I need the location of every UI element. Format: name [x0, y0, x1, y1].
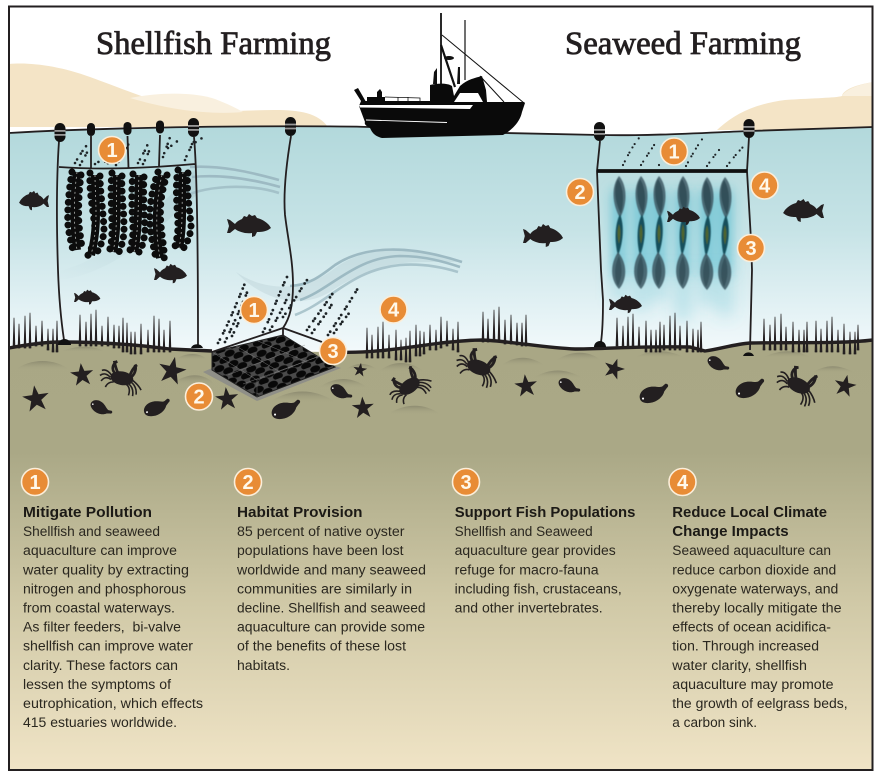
- column 3: support fish populations: 3: [460, 472, 472, 494]
- ocean current streaks: oyster cage: [236, 250, 462, 315]
- column 4: reduce local climate change impacts: [669, 468, 848, 730]
- column 4: reduce local climate change impacts: water clarity, shellfish: [671, 658, 807, 673]
- column 2: habitat provision: [234, 468, 426, 673]
- column 1: mitigate pollution: lessen the symptoms of: [23, 677, 171, 692]
- number badges: diagram: 2: [193, 386, 205, 408]
- nutrient particles: [75, 137, 203, 165]
- column 1: mitigate pollution: water quality by extracting: [22, 562, 189, 577]
- column 3: support fish populations: [452, 468, 635, 616]
- oyster cage farm: [203, 117, 358, 401]
- seabed line: [9, 340, 873, 352]
- column 2: habitat provision: aquaculture can provide some: [237, 620, 425, 635]
- flatfish: [88, 352, 766, 421]
- water body: [9, 126, 873, 350]
- waterline: [9, 126, 873, 135]
- column 1: mitigate pollution: nitrogen and phosphorous: [23, 581, 186, 596]
- column 4: reduce local climate change impacts: reduce carbon dioxide and: [672, 562, 836, 577]
- ropes and crossbar: [57, 135, 198, 345]
- mussel strings: [68, 170, 191, 261]
- column 1: mitigate pollution: shellfish can improve water: [23, 639, 194, 654]
- fishing boat: [354, 13, 525, 138]
- ropes: [597, 137, 752, 350]
- number badges: diagram: 1: [668, 142, 680, 164]
- column 4: reduce local climate change impacts: oxygenate waterways, and: [672, 581, 838, 596]
- sediment mounds: [15, 347, 855, 414]
- number badges: diagram: 1: [248, 300, 260, 322]
- number badges: diagram: 4: [388, 300, 400, 322]
- column 2: habitat provision: 2: [242, 472, 254, 494]
- crossbar: [597, 169, 747, 173]
- number badges: diagram: [98, 136, 778, 410]
- column 1: mitigate pollution: Shellfish and seaweed: [23, 524, 160, 539]
- column 4: reduce local climate change impacts: Reduce Local Climate: [672, 504, 827, 521]
- buoys: [54, 118, 199, 142]
- cage shadow: [203, 366, 341, 401]
- anchors: [58, 339, 203, 348]
- seaweed farm: [594, 119, 754, 356]
- column 1: mitigate pollution: clarity. These factors can: [23, 658, 178, 673]
- column 2: habitat provision: populations have been lost: [237, 543, 404, 558]
- column 1: mitigate pollution: Mitigate Pollution: [23, 504, 152, 521]
- number badges: diagram: 2: [574, 182, 586, 204]
- column 1: mitigate pollution: 1: [29, 472, 41, 494]
- nutrient particles: [218, 277, 358, 343]
- ocean current streaks: shellfish lines: [50, 167, 280, 280]
- column 3: support fish populations: refuge for macro-fauna: [455, 562, 599, 577]
- column 4: reduce local climate change impacts: tion. Through increased: [672, 639, 819, 654]
- fish school: [19, 191, 824, 313]
- distant shoreline hills: [9, 64, 873, 130]
- column 2: habitat provision: of the benefits of these lost: [237, 639, 406, 654]
- title: shellfish farming: Shellfish Farming: [96, 26, 331, 62]
- column 1: mitigate pollution: 415 estuaries worldwide.: [23, 715, 177, 730]
- column 4: reduce local climate change impacts: Change Impacts: [672, 523, 789, 540]
- column 3: support fish populations: aquaculture gear provides: [455, 543, 616, 558]
- column 1: mitigate pollution: eutrophication, which effects: [23, 696, 203, 711]
- column 2: habitat provision: decline. Shellfish and seaweed: [237, 600, 426, 616]
- number badges: diagram: 4: [759, 176, 771, 198]
- shellfish longline farm: [54, 118, 203, 348]
- seaweed blades: [612, 176, 732, 290]
- column 3: support fish populations: Shellfish and Seaweed: [455, 524, 593, 539]
- column 2: habitat provision: habitats.: [237, 658, 290, 673]
- column 1: mitigate pollution: As filter feeders, bi-valve: [23, 620, 181, 635]
- cage: [212, 335, 335, 397]
- cage mesh: [212, 341, 335, 397]
- title: seaweed farming: Seaweed Farming: [565, 26, 801, 62]
- number badges: diagram: 3: [327, 341, 339, 363]
- column 4: reduce local climate change impacts: 4: [677, 472, 689, 494]
- column 4: reduce local climate change impacts: the growth of eelgrass beds,: [672, 696, 848, 711]
- column 4: reduce local climate change impacts: aquaculture may promote: [672, 677, 834, 692]
- column 2: habitat provision: Habitat Provision: [237, 504, 362, 521]
- seagrass beds: [13, 307, 859, 362]
- column 1: mitigate pollution: from coastal waterways.: [23, 600, 175, 616]
- seaweed glow: [619, 190, 725, 320]
- column 3: support fish populations: and other invertebrates.: [455, 600, 603, 616]
- number badges: diagram: 1: [106, 140, 118, 162]
- column 2: habitat provision: communities are similarly in: [237, 581, 412, 596]
- column 4: reduce local climate change impacts: effects of ocean acidifica-: [672, 620, 831, 635]
- buoys: [594, 119, 754, 141]
- number badges: diagram: 3: [745, 238, 757, 260]
- crabs: [97, 344, 825, 412]
- nutrient particles: [623, 138, 744, 166]
- column 4: reduce local climate change impacts: Seaweed aquaculture can: [672, 543, 831, 558]
- anchors: [594, 341, 754, 356]
- buoy and line: [285, 117, 296, 136]
- column 3: support fish populations: including fish, crustaceans,: [455, 581, 622, 596]
- sea floor: [9, 340, 873, 771]
- column 1: mitigate pollution: [22, 468, 203, 730]
- column 4: reduce local climate change impacts: thereby locally mitigate the: [672, 600, 842, 616]
- column 2: habitat provision: 85 percent of native oyster: [237, 524, 405, 539]
- starfish: [21, 354, 858, 418]
- column 1: mitigate pollution: aquaculture can improve: [23, 543, 177, 558]
- column 4: reduce local climate change impacts: a carbon sink.: [672, 715, 757, 730]
- column 2: habitat provision: worldwide and many seaweed: [236, 562, 426, 577]
- column 3: support fish populations: Support Fish Populations: [455, 504, 635, 521]
